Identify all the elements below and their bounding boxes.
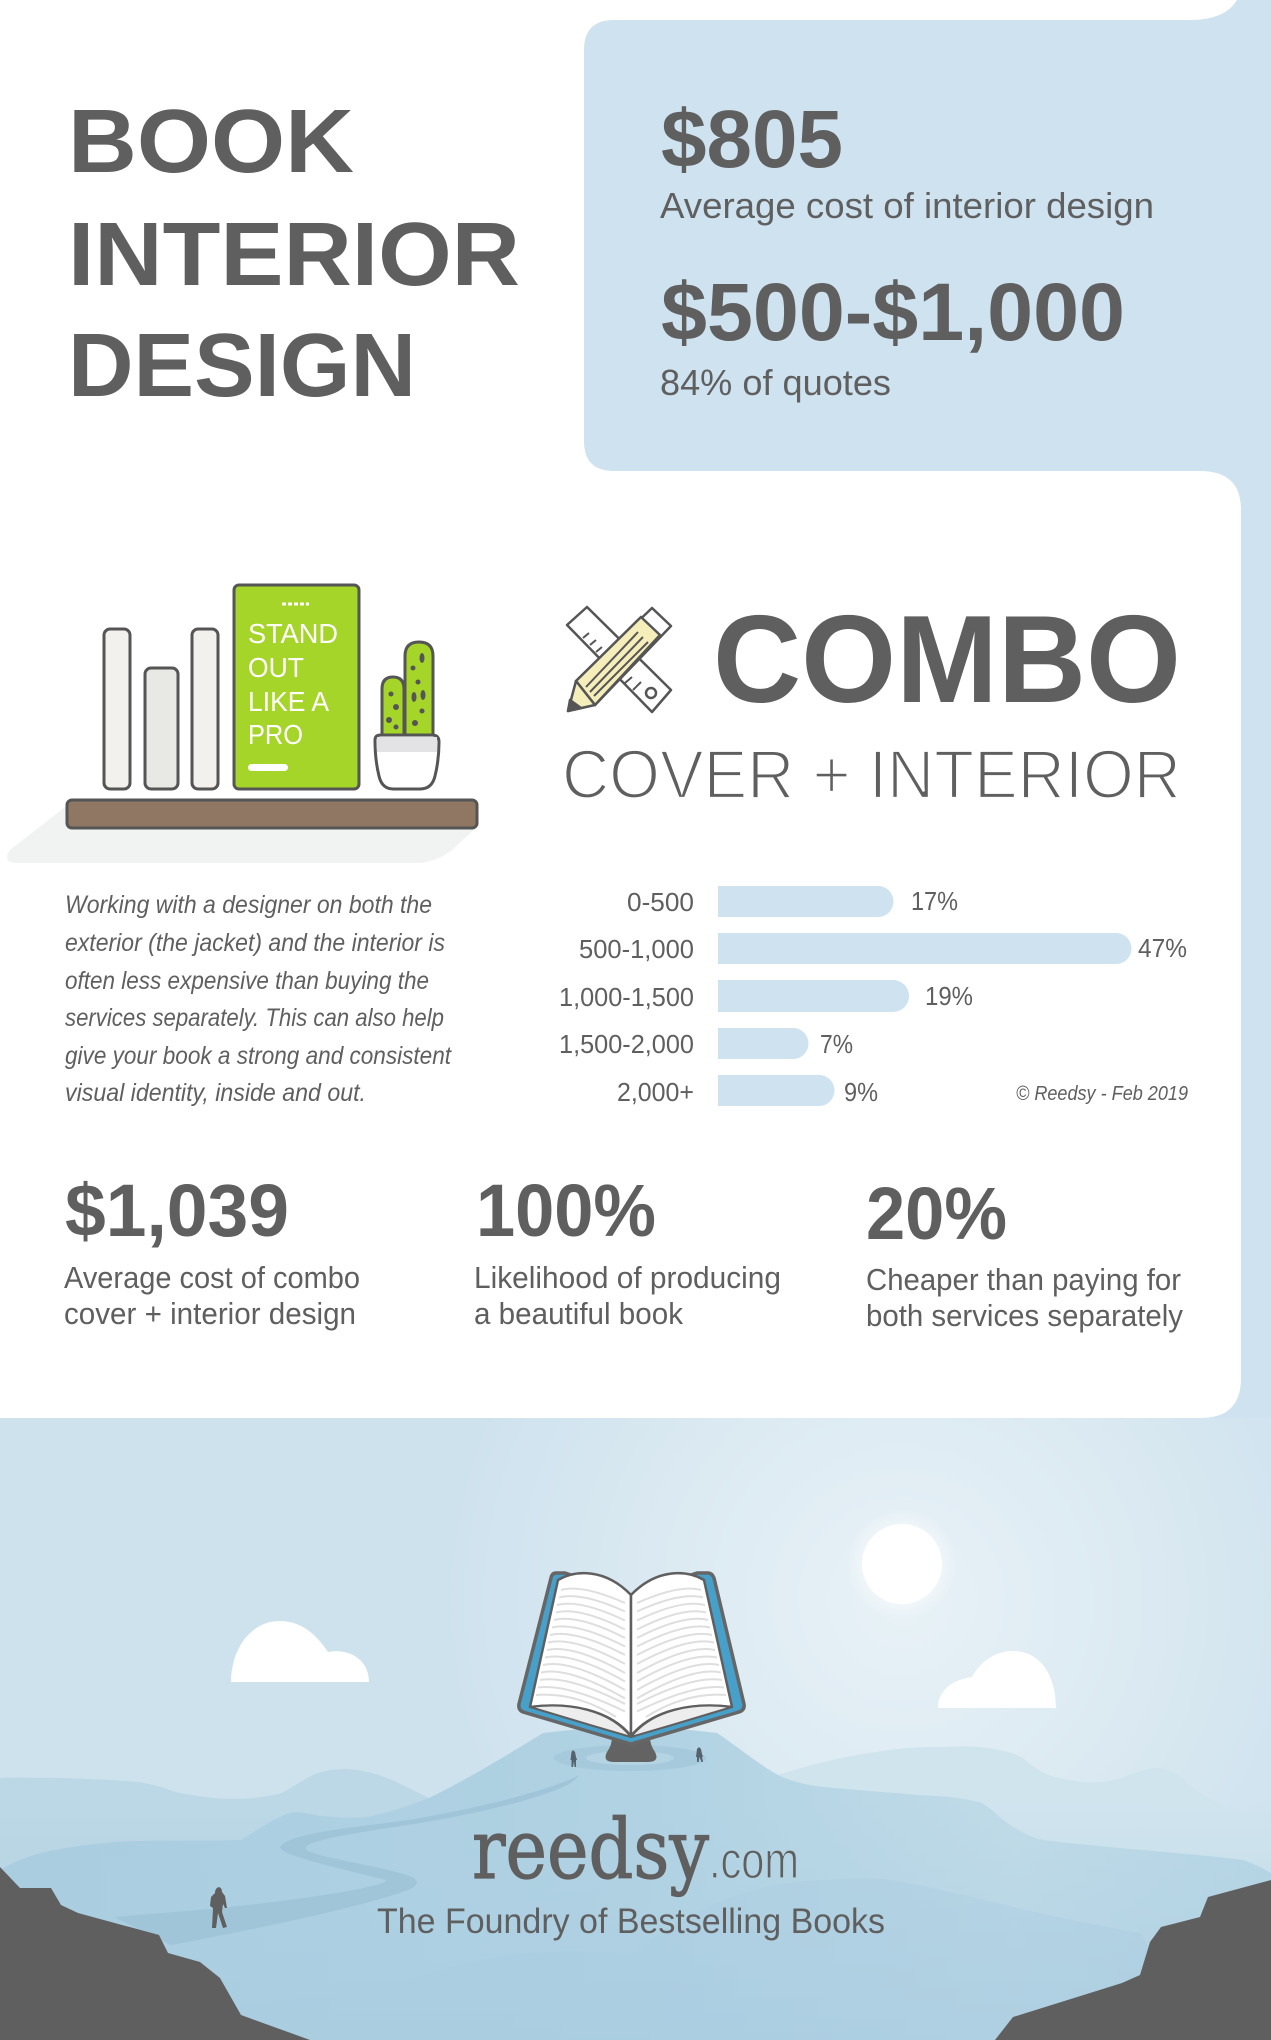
axis labels: 1,000-1,500: [559, 982, 694, 1012]
stat: cheaper: Cheaper than paying for: [866, 1262, 1181, 1297]
open book on mountain: [519, 1573, 744, 1744]
shelf shadow: [7, 803, 476, 863]
values: 47%: [1138, 933, 1187, 963]
tiny figures: [570, 1747, 703, 1767]
panel: interior cost stats: 84% of quotes: [660, 362, 891, 403]
green book: [234, 585, 359, 789]
stat: average combo cost: Average cost of combo: [64, 1260, 360, 1295]
sun: [846, 1508, 958, 1620]
axis labels: [559, 887, 694, 1107]
reedsy logo: reedsy: [472, 1803, 710, 1898]
tagline: The Foundry of Bestselling Books: [377, 1902, 885, 1941]
bar chart: word count pricing distribution: [559, 886, 1187, 1107]
ring around pedestal: [554, 1745, 706, 1771]
page lines right: [637, 1589, 726, 1717]
winding path: [114, 1775, 580, 1945]
stat: average combo cost: $1,039: [65, 1169, 289, 1252]
book cover: [519, 1573, 744, 1744]
stat: likelihood: [474, 1169, 781, 1331]
values: 17%: [911, 886, 958, 916]
book pedestal: [606, 1737, 656, 1762]
panel: blue stats and frame: [584, 0, 1271, 1420]
green book: STAND: [248, 618, 338, 649]
body text: services separately. This can also help: [65, 1004, 444, 1032]
title: [68, 92, 520, 416]
bars: [718, 886, 1132, 1106]
shelf board: [67, 800, 477, 828]
stat: average combo cost: [64, 1169, 360, 1331]
page lines left: [536, 1589, 625, 1717]
values: 19%: [925, 981, 973, 1011]
axis labels: 1,500-2,000: [559, 1029, 694, 1059]
title: BOOK: [68, 92, 354, 192]
stat: likelihood: 100%: [476, 1169, 656, 1252]
lower fade: [0, 1800, 1271, 2040]
stat: cheaper: [866, 1172, 1183, 1333]
illustration: bookshelf: [7, 585, 477, 863]
plain books: [104, 629, 218, 789]
stat: cheaper: 20%: [866, 1172, 1007, 1255]
panel: mountain landscape footer: [0, 1418, 1271, 2040]
cloud right: [938, 1651, 1056, 1708]
panel: interior cost stats: [660, 94, 1154, 403]
stat: average combo cost: cover + interior design: [64, 1296, 356, 1331]
icon: pencil and ruler: [567, 607, 671, 712]
sky: [0, 1418, 1271, 2040]
stat: likelihood: a beautiful book: [474, 1296, 683, 1331]
body text: Working with a designer on both the: [65, 891, 432, 919]
page fan right: [631, 1706, 732, 1737]
body text: give your book a strong and consistent: [65, 1042, 452, 1070]
body text: [65, 891, 452, 1107]
green book: LIKE A: [248, 686, 329, 717]
green book: OUT: [248, 652, 304, 683]
cactus pot: [375, 642, 439, 789]
hills back left: [0, 1769, 429, 1900]
cliff right: [995, 1880, 1271, 2040]
lower foreground ridge: [237, 1878, 1200, 2040]
hiker: [210, 1887, 227, 1928]
title: INTERIOR: [68, 205, 520, 305]
values: 9%: [844, 1077, 878, 1107]
reedsy logo: .com: [709, 1832, 799, 1890]
hills back right: [778, 1746, 1271, 2040]
body text: often less expensive than buying the: [65, 967, 429, 995]
cliff left: [0, 1867, 310, 2040]
stat: likelihood: Likelihood of producing: [474, 1260, 781, 1295]
values: [820, 886, 1187, 1107]
cloud left: [231, 1621, 369, 1682]
panel: interior cost stats: $805: [661, 94, 843, 185]
values: 7%: [820, 1029, 853, 1059]
heading: combo: COMBO: [713, 591, 1181, 729]
left page: [530, 1573, 631, 1736]
panel: interior cost stats: Average cost of interior design: [660, 185, 1154, 226]
title: DESIGN: [68, 316, 416, 416]
body text: exterior (the jacket) and the interior is: [65, 929, 445, 957]
axis labels: 0-500: [627, 887, 694, 917]
panel: interior cost stats: $500-$1,000: [661, 267, 1125, 358]
stat: cheaper: both services separately: [866, 1298, 1183, 1333]
body text: visual identity, inside and out.: [65, 1079, 366, 1107]
green book: PRO: [248, 719, 303, 750]
axis labels: 2,000+: [617, 1077, 694, 1107]
central mountain: [0, 1728, 1271, 2040]
page fan left: [530, 1706, 631, 1737]
source note: © Reedsy - Feb 2019: [1016, 1083, 1188, 1105]
right page: [631, 1573, 732, 1736]
heading: cover + interior: COVER + INTERIOR: [562, 736, 1181, 813]
axis labels: 500-1,000: [579, 934, 694, 964]
